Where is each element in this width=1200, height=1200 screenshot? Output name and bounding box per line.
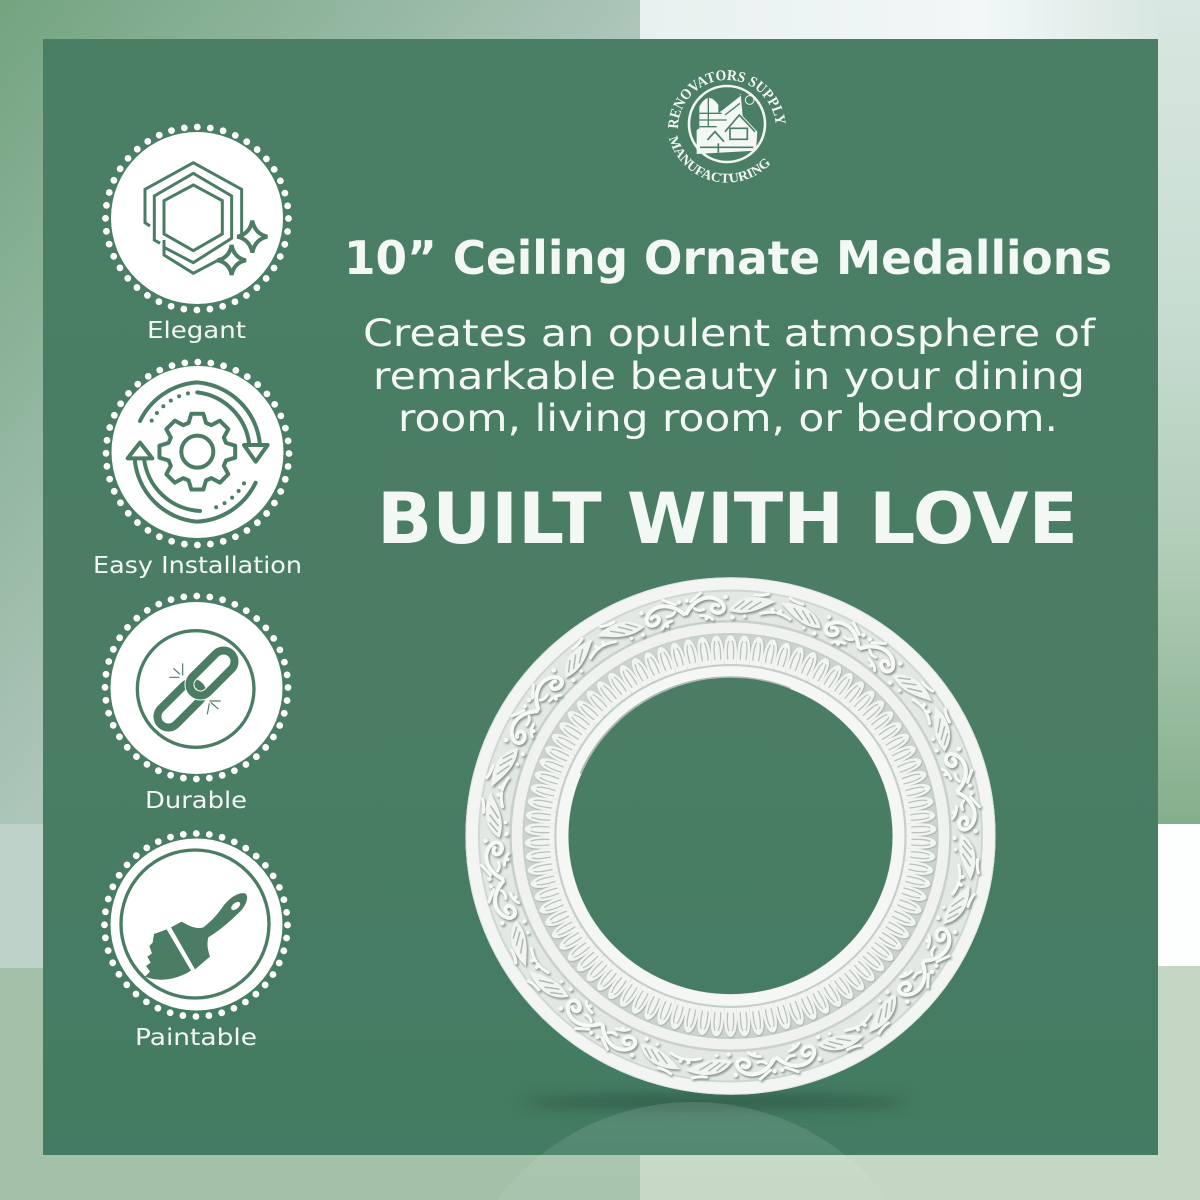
brand logo xyxy=(668,70,786,183)
background: left pale block xyxy=(0,824,43,968)
feature: paintable xyxy=(104,834,288,1051)
label: durable: Durable xyxy=(145,788,247,814)
brand logo: RENOVATORS SUPPLY xyxy=(668,70,786,129)
feature: durable xyxy=(105,596,288,814)
background: right white block xyxy=(1158,824,1200,966)
feature: elegant xyxy=(106,127,288,344)
label: easy installation: Easy Installation xyxy=(93,553,302,579)
background: lower right block xyxy=(640,966,1200,1200)
headline: BUILT WITH LOVE xyxy=(377,478,1078,560)
background: right gradient column xyxy=(1158,0,1200,824)
icon: hexagons and sparkles xyxy=(145,163,267,275)
description: Creates an opulent atmosphere of xyxy=(363,312,1096,355)
background: top right band xyxy=(640,0,1158,39)
medallion shadow xyxy=(520,1095,910,1109)
product: ceiling medallion xyxy=(466,578,995,1094)
brand logo: MANUFACTURING xyxy=(668,135,770,183)
title: 10” Ceiling Ornate Medallions xyxy=(344,231,1112,285)
feature: easy installation xyxy=(93,362,302,579)
medallion reflection xyxy=(497,1102,889,1200)
background: left gradient block xyxy=(0,0,640,824)
icon: paint brush xyxy=(121,850,269,998)
description: remarkable beauty in your dining xyxy=(373,355,1085,398)
description: room, living room, or bedroom. xyxy=(398,397,1058,440)
icon: chain link xyxy=(137,631,254,747)
icon: gear and arrows xyxy=(128,382,268,522)
description xyxy=(363,312,1096,440)
background: left lower block xyxy=(0,968,640,1200)
label: paintable: Paintable xyxy=(135,1025,257,1051)
label: elegant: Elegant xyxy=(147,318,246,344)
